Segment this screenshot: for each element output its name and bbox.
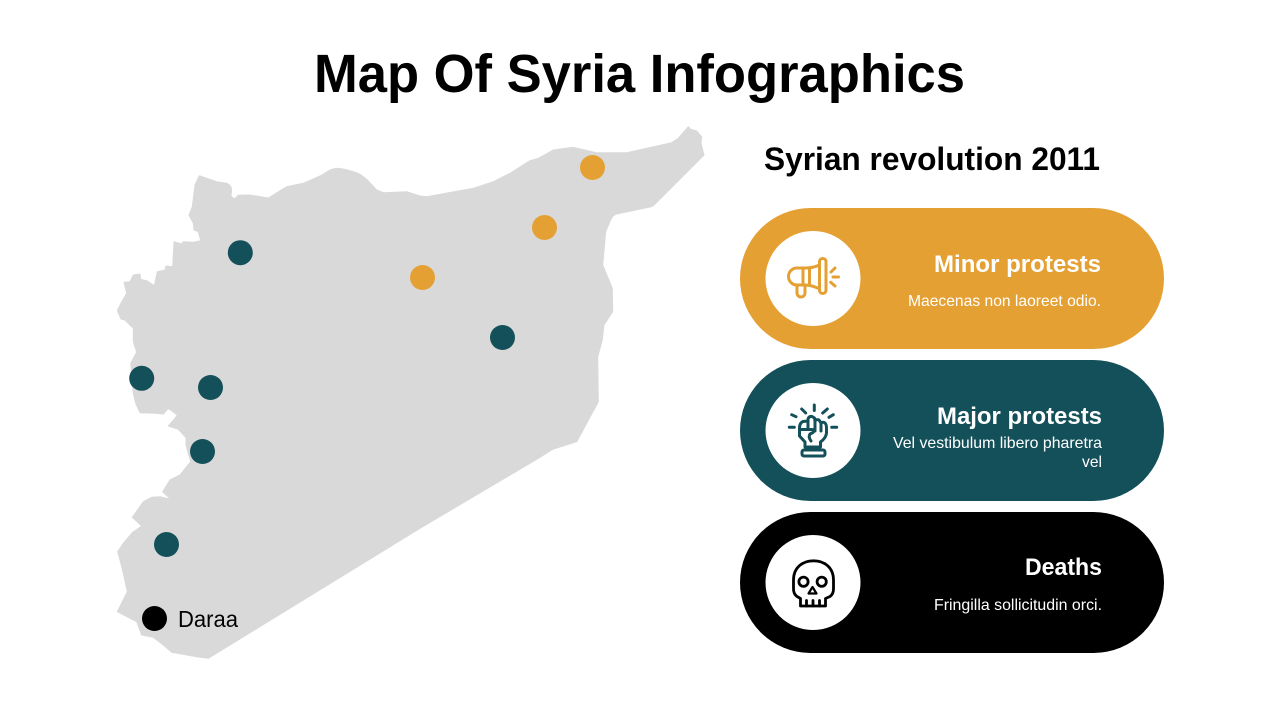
icon: skull: [794, 561, 834, 606]
text: major protests description: Vel vestibulum libero pharetra: [893, 435, 1102, 452]
heading: minor protests: Minor protests: [934, 251, 1101, 278]
Daraa marker and label: [142, 606, 238, 632]
text: minor protests description: Maecenas non laoreet odio.: [908, 293, 1101, 310]
panel: minor protests: [740, 208, 1164, 349]
heading: major protests: Major protests: [937, 403, 1102, 430]
icon: megaphone: [788, 258, 838, 297]
panel: deaths: [740, 512, 1164, 653]
subtitle: Syrian revolution 2011: [764, 141, 1100, 177]
map shape: [117, 127, 704, 658]
panel: major protests: [740, 360, 1164, 501]
orange markers: [410, 155, 605, 290]
teal markers: [129, 240, 515, 557]
title: Map Of Syria Infographics: [314, 44, 965, 104]
map panel: Syria with markers: [117, 127, 704, 658]
Daraa marker and label: Daraa: [178, 606, 238, 632]
heading: deaths: Deaths: [1025, 554, 1102, 581]
text: deaths description: Fringilla sollicitudin orci.: [934, 597, 1102, 614]
icon: raised fist: [789, 405, 837, 456]
text: major protests description: vel: [1082, 454, 1102, 471]
text: major protests description: [893, 435, 1102, 471]
